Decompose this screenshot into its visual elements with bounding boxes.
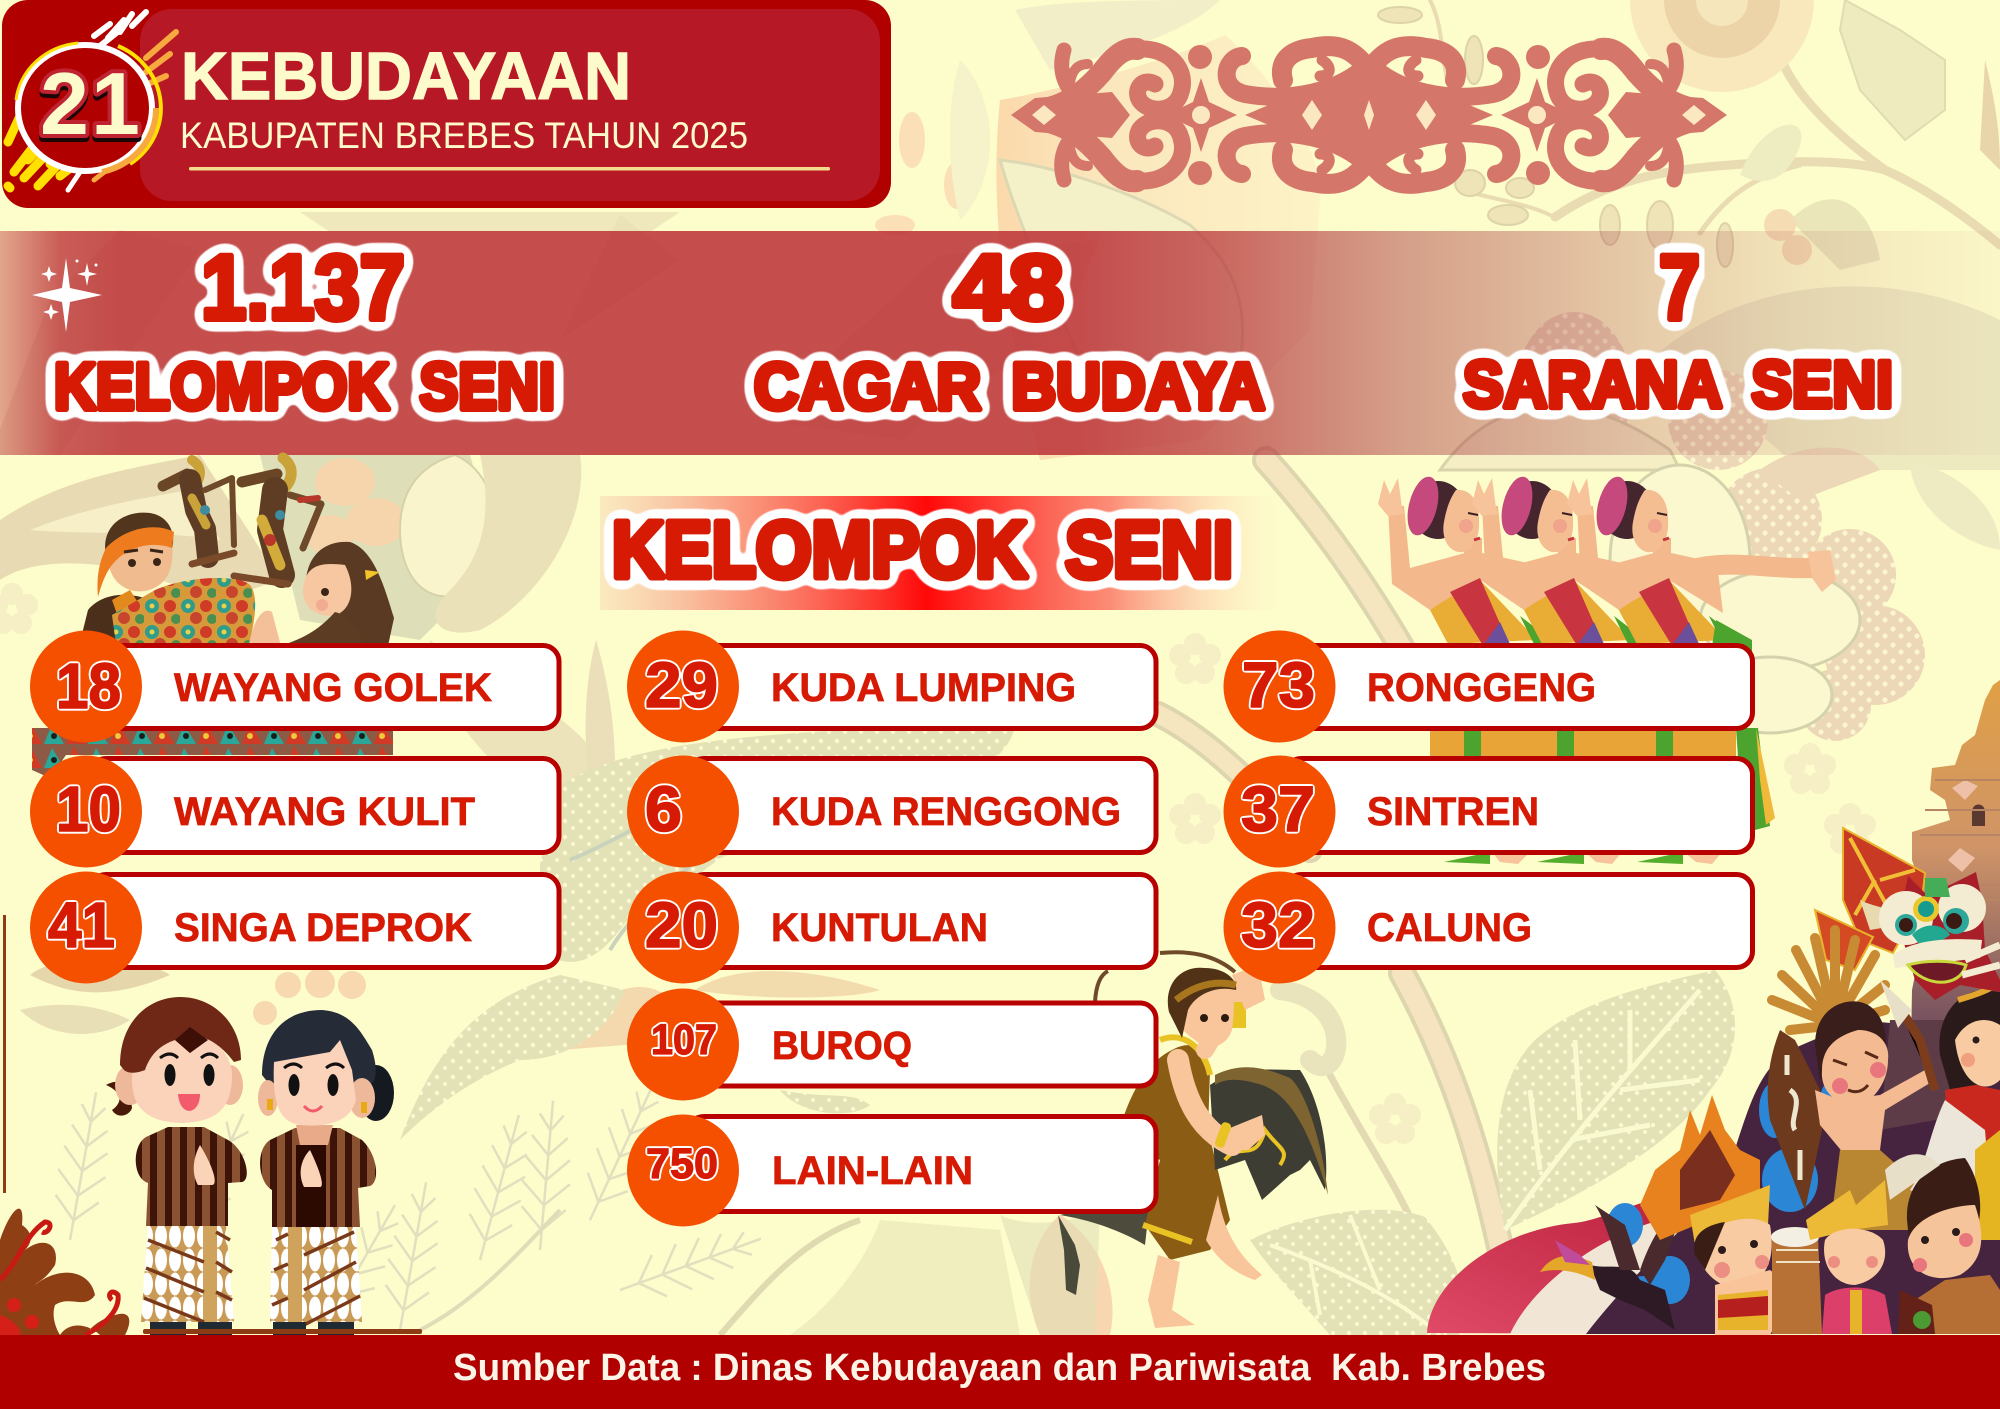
footer source text: Sumber Data : Dinas Kebudayaan dan Pariwisata Kab. Brebes (453, 1347, 1546, 1389)
large olive leaves bottom (1497, 970, 1735, 1230)
stat: 48 cagar budaya: 48 (953, 237, 1064, 339)
left batik flower and leaves (0, 455, 280, 600)
row: 73 ronggeng: 73 (1242, 649, 1315, 721)
row: 32 calung: 32 (1241, 889, 1315, 961)
boy (78, 513, 174, 660)
puppet right (234, 458, 321, 584)
small blooms (1169, 633, 1221, 684)
horse tail (1058, 1215, 1080, 1295)
row: 37 sintren: 37 (1241, 773, 1315, 845)
row: 750 lain-lain: LAIN-LAIN (772, 1149, 973, 1193)
row: 750 lain-lain (627, 1114, 1156, 1226)
row: 18 wayang golek (30, 630, 559, 742)
hornbill (1540, 1205, 1685, 1330)
stat: 1.137 kelompok seni (54, 237, 555, 423)
row: 37 sintren: SINTREN (1367, 790, 1539, 834)
horse (1210, 1069, 1326, 1200)
row: 6 kuda renggong (627, 756, 1156, 868)
stat: 48 cagar budaya: CAGAR BUDAYA (754, 349, 1265, 423)
chain vines (1158, 460, 1505, 1270)
sunflower top right (1630, 0, 1814, 92)
icon: number badge 21: 21 (40, 54, 140, 153)
illustration: Indonesian cultural group (1427, 930, 2000, 1335)
rider body (1118, 1045, 1230, 1260)
row: 6 kuda renggong: 6 (645, 773, 682, 845)
ornament: Dayak motif top right (1011, 45, 1727, 185)
dancer three (1567, 474, 1836, 660)
leg (1148, 1255, 1195, 1328)
stat: 1.137 kelompok seni: 1.137 (201, 237, 405, 339)
row: 107 buroq (627, 988, 1156, 1100)
head (1173, 969, 1234, 1047)
batik skirt (32, 728, 393, 778)
left floral under band (0, 230, 200, 455)
girl centre (1806, 1180, 1892, 1334)
stat: 7 sarana seni: SARANA SENI (1463, 347, 1893, 421)
illustration: shadow puppets children (32, 458, 394, 778)
row: 73 ronggeng: RONGGENG (1367, 666, 1596, 710)
row: 20 kuntulan: 20 (645, 889, 718, 961)
subtitle: KABUPATEN BREBES TAHUN 2025 (180, 115, 748, 156)
batik cloth (112, 578, 255, 660)
stat: 7 sarana seni: 7 (1659, 237, 1700, 339)
row: 32 calung (1224, 872, 1752, 984)
title: KEBUDAYAAN (181, 39, 631, 114)
illustration: barong lion (1879, 872, 2000, 1000)
decoration: bottom-left coral ornament (0, 1209, 129, 1335)
arms (1178, 1060, 1232, 1145)
tribal man straw headdress (1772, 930, 1885, 1030)
row: 10 wayang kulit: WAYANG KULIT (174, 790, 475, 834)
divider line (189, 167, 830, 170)
red white swoosh (1427, 1200, 1720, 1334)
stat: 7 sarana seni (1463, 237, 1893, 421)
top centre peach flower (996, 35, 1320, 460)
girl with crown (1690, 1185, 1795, 1335)
row: 29 kuda lumping: 29 (645, 649, 718, 721)
header panel (2, 0, 891, 208)
row: 29 kuda lumping: KUDA LUMPING (771, 666, 1076, 710)
boy right (1885, 1154, 2000, 1334)
row: 107 buroq: BUROQ (772, 1024, 912, 1068)
illustration: gunungan wayang (1815, 828, 1925, 970)
label rows (30, 630, 1752, 1226)
stat: 48 cagar budaya (754, 237, 1265, 423)
row: 20 kuntulan (627, 872, 1156, 984)
flame crown (1640, 1095, 1760, 1240)
man (106, 997, 247, 1335)
row: 10 wayang kulit (30, 756, 559, 868)
illustration: dancers (1378, 474, 1836, 864)
stat: 1.137 kelompok seni: KELOMPOK SENI (54, 349, 555, 423)
woman right (1910, 982, 2000, 1240)
girl (248, 542, 394, 660)
row: 6 kuda renggong: KUDA RENGGONG (771, 790, 1121, 834)
icon: sparkles (32, 258, 102, 332)
section heading banner: KELOMPOK SENI (612, 505, 1233, 594)
row: 32 calung: CALUNG (1367, 906, 1532, 950)
row: 41 singa deprok: SINGA DEPROK (174, 906, 472, 950)
drum (1771, 1227, 1822, 1334)
dark backdrop (1586, 1020, 2000, 1334)
decoration: left vertical line (3, 915, 6, 1193)
dotted leaf (540, 725, 1015, 885)
stat band background (0, 231, 2000, 455)
row: 18 wayang golek: 18 (56, 650, 121, 722)
feet (1444, 852, 1722, 864)
tribal man (1815, 980, 1935, 1230)
footer bar (0, 1335, 2000, 1409)
big leaf right below band (1650, 286, 2000, 470)
row: 107 buroq: 107 (651, 1016, 717, 1064)
small peach leaves near header (875, 112, 970, 235)
illustration: kuda lumping rider (1058, 952, 1328, 1328)
shield (1768, 1030, 1822, 1210)
illustration: Javanese couple (106, 997, 422, 1335)
row: 41 singa deprok (30, 872, 559, 984)
woman (258, 1010, 394, 1335)
row: 18 wayang golek: WAYANG GOLEK (174, 666, 492, 710)
cloud blue (1607, 1082, 1840, 1304)
row: 20 kuntulan: KUNTULAN (771, 906, 988, 950)
row: 41 singa deprok: 41 (48, 889, 115, 961)
whip (1095, 952, 1235, 1002)
row: 29 kuda lumping (627, 630, 1156, 742)
row: 73 ronggeng (1224, 630, 1752, 742)
sash (1736, 728, 1770, 830)
row: 37 sintren (1224, 756, 1752, 868)
skirts (1430, 728, 1736, 756)
illustration: temple (1910, 680, 2000, 1100)
dotted lobed peach flower right (1718, 468, 1822, 572)
puppet left (163, 460, 234, 564)
ferns bottom left (46, 1088, 120, 1244)
row: 10 wayang kulit: 10 (56, 773, 121, 845)
row: 750 lain-lain: 750 (646, 1140, 718, 1188)
icon: number badge 21 (8, 12, 176, 190)
branches top right (1430, 0, 2000, 245)
ground line (143, 1329, 422, 1334)
